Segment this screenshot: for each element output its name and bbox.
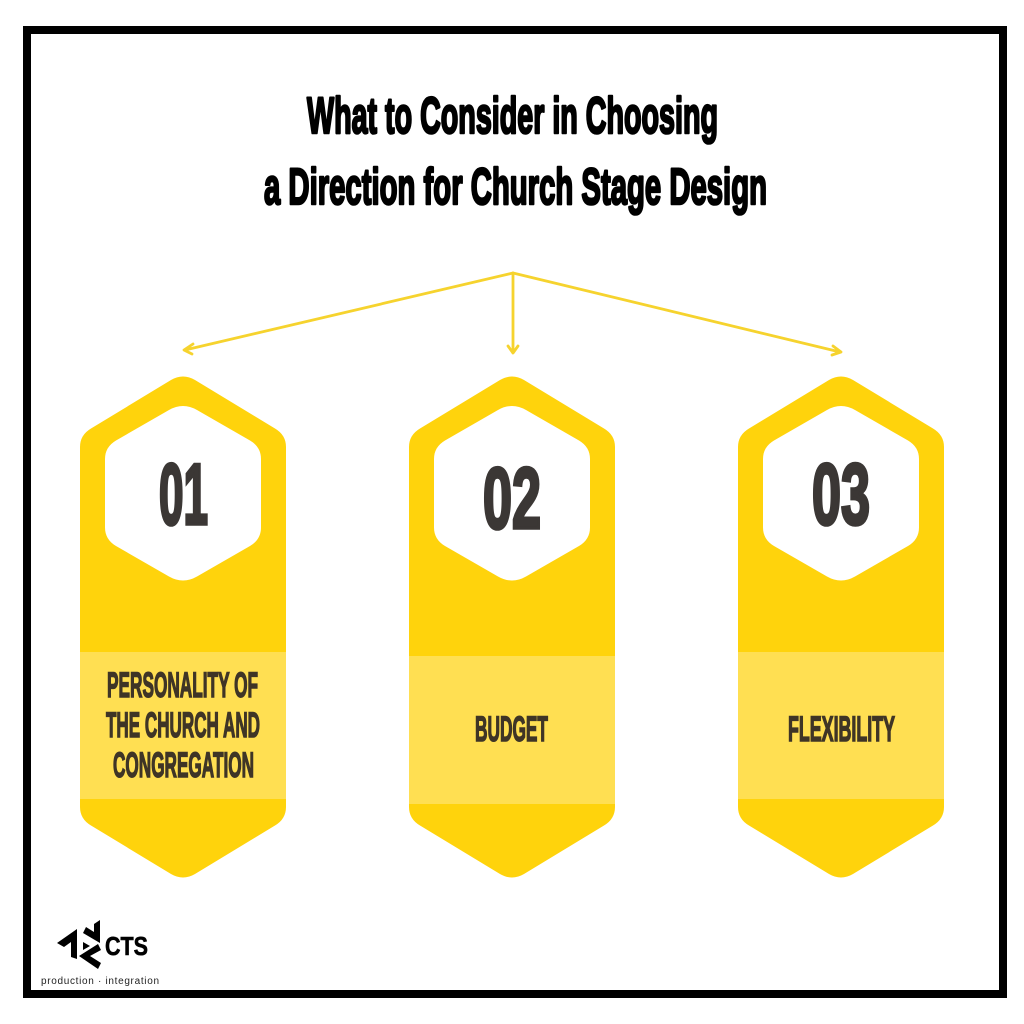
text: THE CHURCH AND [106,706,260,745]
panel: card 02 budget [409,376,615,878]
number 01: 01 [159,447,208,543]
number 02: 02 [483,451,541,547]
title: What to Consider in Choosing [307,87,718,144]
icon: white hexagon 02 [434,406,590,580]
label: personality of the church and congregation: CONGREGATION [113,746,254,785]
band: card 02 label background [409,656,615,804]
label: personality of the church and congregation [106,666,260,785]
panel: card 01 personality [80,376,286,878]
arrows from title to the three cards [184,273,841,355]
icon: CTS triangular mark [57,920,101,969]
icon: white hexagon 03 [763,406,919,580]
logo wordmark: CTS [105,931,148,961]
band: card 03 label background [738,652,944,799]
title [264,87,767,215]
label: flexibility: FLEXIBILITY [788,710,895,749]
panel: card 03 flexibility [738,376,944,878]
band: card 01 label background [80,652,286,799]
logo tagline: production · integration [41,976,159,987]
icon: white hexagon 01 [105,406,261,580]
logo: CTS [41,920,159,987]
number 03: 03 [812,447,870,543]
text: BUDGET [475,710,548,749]
text: PERSONALITY OF [107,666,258,705]
